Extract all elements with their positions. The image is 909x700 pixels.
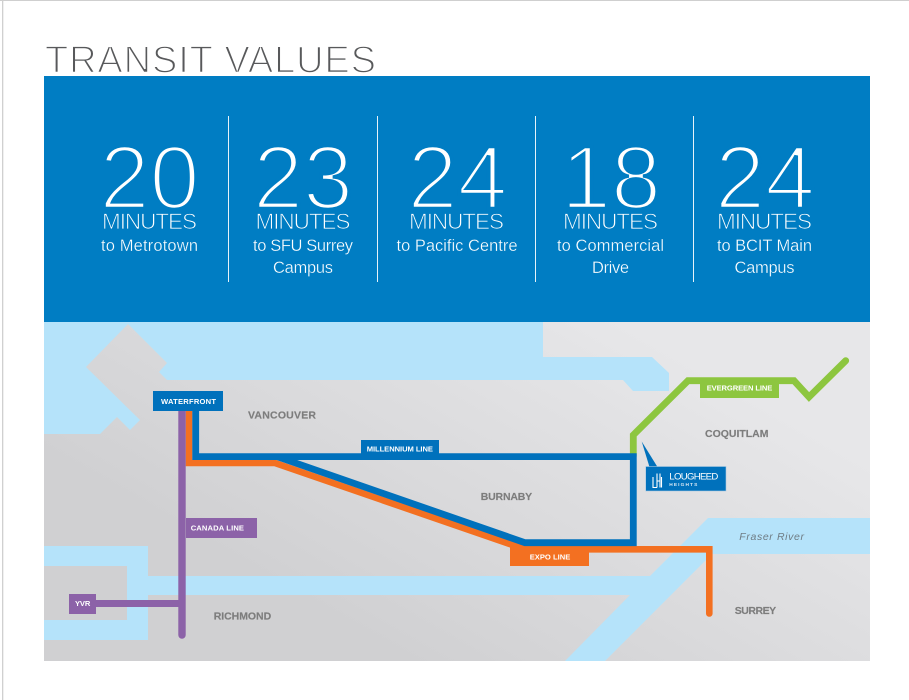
- station: yvr: YVR: [75, 599, 91, 608]
- stat: 18 minutes to Commercial Drive: MINUTES: [563, 209, 658, 234]
- stat: 18 minutes to Commercial Drive: Drive: [592, 259, 629, 277]
- stat: 23 minutes to SFU Surrey Campus: to SFU Surrey: [253, 237, 354, 255]
- line: expo: EXPO LINE: [530, 552, 570, 561]
- label: coquitlam: COQUITLAM: [705, 428, 769, 440]
- line: expo: [189, 411, 713, 617]
- water: fraser river: [148, 518, 870, 661]
- stat: 20 minutes to Metrotown: 20: [99, 129, 200, 229]
- station: yvr: [69, 594, 96, 614]
- stat: 24 minutes to BCIT Main Campus: Campus: [734, 259, 794, 277]
- label: surrey: SURREY: [735, 605, 776, 617]
- stat: 23 minutes to SFU Surrey Campus: [253, 129, 354, 277]
- stat: 24 minutes to Pacific Centre: 24: [407, 129, 508, 229]
- label: fraser river: Fraser River: [739, 531, 804, 543]
- water: airport channel: [44, 546, 148, 640]
- line: canada: [96, 411, 257, 635]
- stat: 20 minutes to Metrotown: MINUTES: [102, 209, 197, 234]
- station: waterfront: WATERFRONT: [161, 397, 216, 406]
- stat: 23 minutes to SFU Surrey Campus: MINUTES: [256, 209, 350, 234]
- station: waterfront: [153, 391, 223, 411]
- callout: lougheed heights: LOUGHEED: [669, 472, 718, 482]
- line: canada: CANADA LINE: [191, 523, 244, 532]
- label: burnaby: BURNABY: [481, 491, 532, 503]
- water: burrard inlet: [44, 322, 669, 434]
- stat: 24 minutes to Pacific Centre: MINUTES: [409, 209, 504, 234]
- stat: 18 minutes to Commercial Drive: to Commercial: [557, 237, 664, 255]
- stat: 24 minutes to BCIT Main Campus: to BCIT Main: [717, 237, 812, 255]
- stat: 18 minutes to Commercial Drive: [557, 129, 664, 277]
- stat: 24 minutes to BCIT Main Campus: MINUTES: [717, 209, 812, 234]
- icon: lh logo: [653, 474, 662, 488]
- stat: 23 minutes to SFU Surrey Campus: 23: [253, 129, 353, 229]
- line: millennium: [196, 411, 633, 543]
- label: vancouver: VANCOUVER: [248, 410, 316, 422]
- stat: 24 minutes to BCIT Main Campus: 24: [715, 129, 815, 229]
- panel: travel times: [44, 76, 870, 322]
- stat: 24 minutes to Pacific Centre: to Pacific Centre: [396, 237, 518, 255]
- label: richmond: RICHMOND: [214, 611, 272, 623]
- line: evergreen: EVERGREEN LINE: [707, 384, 772, 392]
- stat: 23 minutes to SFU Surrey Campus: Campus: [273, 259, 333, 277]
- stat: 24 minutes to Pacific Centre: [396, 129, 518, 255]
- panel: transit map: [44, 322, 870, 661]
- stat: 24 minutes to BCIT Main Campus: [715, 129, 815, 277]
- callout: lougheed heights: [642, 442, 726, 491]
- title: TRANSIT VALUES: [45, 40, 376, 82]
- stat: 18 minutes to Commercial Drive: 18: [561, 129, 661, 229]
- line: millennium: MILLENNIUM LINE: [367, 445, 433, 454]
- stat: 20 minutes to Metrotown: to Metrotown: [101, 237, 198, 255]
- callout: lougheed heights: HEIGHTS: [669, 482, 698, 488]
- line: evergreen: [633, 361, 846, 456]
